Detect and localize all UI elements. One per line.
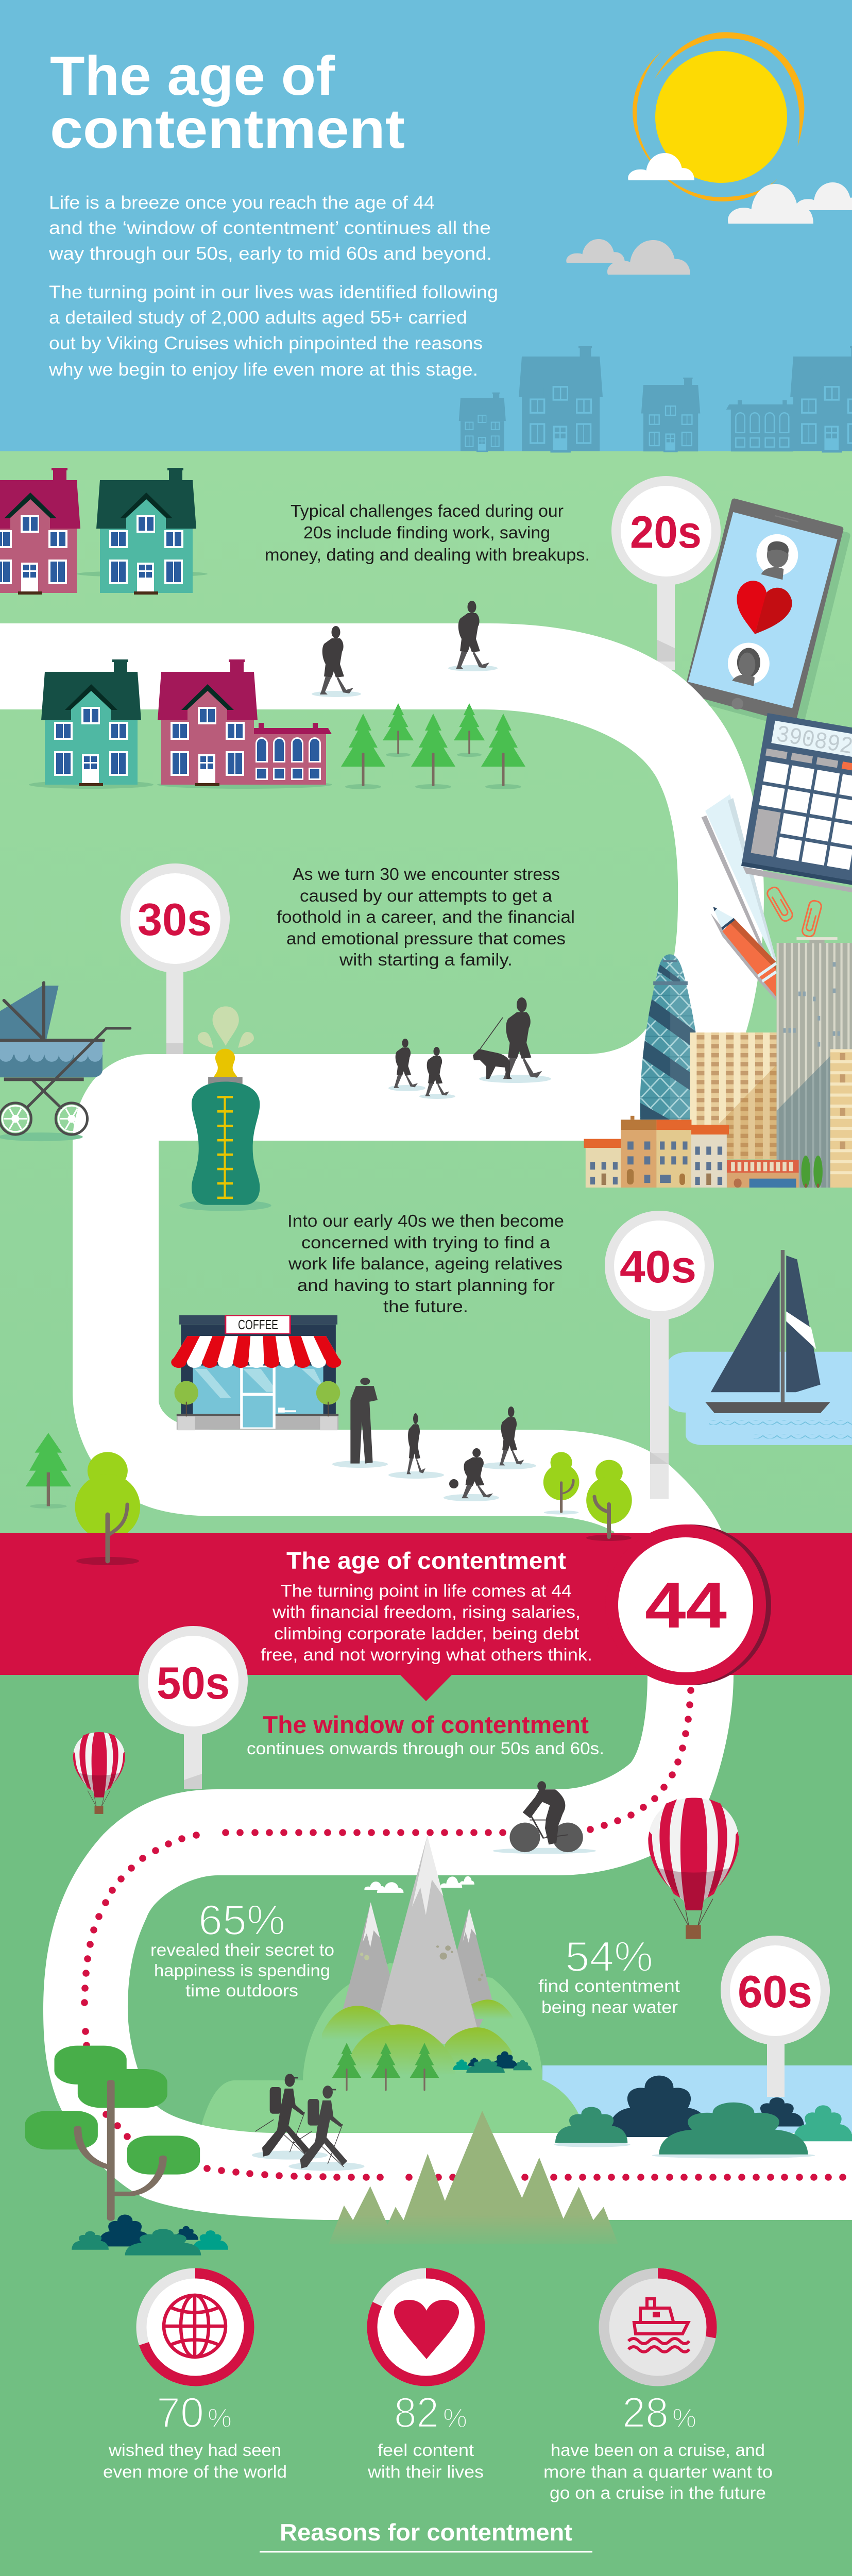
bushes by the water (554, 2076, 852, 2158)
donut: 28 percent ship (604, 2273, 712, 2381)
stat: 65 percent: time outdoors (185, 1981, 298, 2000)
stat text: 28 percent: more than a quarter want to (543, 2462, 773, 2481)
sign: 50s: 50s (157, 1657, 230, 1708)
cyclist (493, 1781, 596, 1854)
icon: ship (628, 2299, 689, 2352)
sign: 40s (605, 1211, 714, 1499)
skyline of distant houses (459, 346, 852, 452)
intro text (48, 193, 498, 380)
window of contentment heading: The window of contentment (263, 1711, 589, 1738)
sign: 20s: 20s (630, 506, 702, 557)
big tree with bushes (25, 2046, 228, 2256)
stat text: 82 percent: feel content (378, 2441, 474, 2460)
sign: 44: 44 (645, 1569, 727, 1641)
30s text block (277, 865, 575, 969)
road (0, 623, 852, 2220)
stat: 65 percent: revealed their secret to (150, 1940, 334, 1959)
stat text: 82 percent: with their lives (367, 2462, 484, 2481)
sign: 40s: 40s (620, 1241, 696, 1292)
foreground forest silhouette (329, 2111, 618, 2244)
coffee shop: COFFEE (238, 1317, 278, 1332)
title (50, 44, 405, 160)
family on the path (332, 1378, 536, 1501)
stat text: 82 percent: 82 (394, 2388, 439, 2436)
background: sky (0, 0, 852, 453)
banner: the age of contentment (0, 1533, 852, 1701)
icon: large balloon (648, 1798, 739, 1939)
intro text: why we begin to enjoy life even more at this stage. (48, 360, 478, 380)
city skyline (584, 937, 852, 1188)
sign: 60s (721, 1936, 830, 2097)
stat: 65 percent: 65% (198, 1896, 285, 1944)
20s text block: 20s include finding work, saving (303, 523, 550, 542)
woman walking dog with children (388, 997, 551, 1099)
banner: the age of contentment: The age of contentment (286, 1547, 566, 1574)
sign: 30s: 30s (138, 894, 212, 945)
stat: 54 percent (538, 1933, 680, 2016)
dotted route (81, 1687, 846, 2181)
stat text: 28 percent: % (672, 2403, 696, 2433)
sign: 44 (605, 1524, 771, 1685)
houses: top row (0, 468, 208, 595)
stat text: 28 percent (543, 2388, 773, 2502)
title: contentment (50, 97, 405, 160)
heading: reasons for contentment (260, 2519, 592, 2552)
30s text block: foothold in a career, and the financial (277, 907, 575, 926)
stat text: 28 percent: 28 (622, 2388, 669, 2436)
stat text: 70 percent: % (208, 2403, 232, 2433)
houses: second row (29, 659, 332, 789)
intro text: Life is a breeze once you reach the age of 44 (49, 193, 435, 213)
intro text: way through our 50s, early to mid 60s and beyond. (48, 244, 492, 264)
donut: 70 percent globe (141, 2273, 249, 2381)
icon: baby bottle (179, 1006, 271, 1211)
icon: small balloon (73, 1732, 125, 1814)
walkers on first stretch (312, 601, 498, 697)
40s text block: Into our early 40s we then become (287, 1211, 564, 1230)
donut: 82 percent heart (372, 2273, 480, 2381)
40s text block: concerned with trying to find a (301, 1233, 551, 1252)
icon: sun with orbit rings (633, 32, 804, 201)
tree shadows and trunks over banner (76, 1497, 632, 1565)
banner: the age of contentment: The turning point in life comes at 44 (281, 1581, 572, 1600)
window of contentment heading (247, 1711, 604, 1758)
stat text: 70 percent: 70 (157, 2388, 204, 2436)
coffee shop (171, 1315, 341, 1430)
sign: 50s (139, 1626, 248, 1789)
20s text block: money, dating and dealing with breakups. (265, 545, 590, 564)
banner: the age of contentment: with financial freedom, rising salaries, (272, 1602, 581, 1621)
sign: 60s: 60s (738, 1966, 812, 2017)
40s text block: and having to start planning for (297, 1276, 555, 1295)
20s text block (265, 501, 590, 564)
icon: globe (164, 2295, 226, 2357)
banner: the age of contentment: free, and not worrying what others think. (261, 1645, 592, 1664)
banner: the age of contentment: climbing corporate ladder, being debt (274, 1624, 579, 1643)
icon: dating app phone (687, 501, 847, 727)
stat: 65 percent (150, 1896, 334, 2000)
stat text: 70 percent: even more of the world (103, 2462, 287, 2481)
stat text: 70 percent (103, 2388, 287, 2481)
stat text: 28 percent: have been on a cruise, and (551, 2441, 765, 2460)
20s text block: Typical challenges faced during our (291, 501, 564, 520)
intro text: a detailed study of 2,000 adults aged 55+ carried (49, 308, 467, 328)
stat text: 70 percent: wished they had seen (108, 2441, 281, 2460)
stat: 54 percent: 54% (565, 1933, 653, 1980)
40s text block: the future. (383, 1297, 468, 1316)
icon: clouds in the sky (566, 153, 852, 275)
sign: 20s (611, 476, 721, 670)
title: The age of (50, 44, 335, 107)
lake with sailboat (667, 1250, 852, 1445)
30s text block: with starting a family. (339, 950, 513, 969)
icon: heart (394, 2300, 459, 2359)
30s text block: caused by our attempts to get a (300, 886, 553, 905)
window of contentment heading: continues onwards through our 50s and 60s. (247, 1739, 604, 1758)
paper, pen and paperclips (702, 794, 852, 1001)
hikers (252, 2074, 365, 2171)
background: upper meadow (0, 451, 852, 1538)
trees near the banner (26, 1433, 632, 1540)
intro text: The turning point in our lives was identified following (49, 282, 498, 302)
stat: 54 percent: being near water (541, 1997, 678, 2016)
background: lower meadow (0, 1669, 852, 2576)
stat text: 82 percent (367, 2388, 484, 2481)
stat: 65 percent: happiness is spending (154, 1961, 330, 1980)
30s text block: As we turn 30 we encounter stress (293, 865, 560, 884)
icon: pram (0, 982, 130, 1141)
sign: 30s (121, 863, 230, 1054)
intro text: and the ‘window of contentment’ continues all the (49, 218, 491, 238)
icon: calculator (741, 713, 852, 888)
40s text block: work life balance, ageing relatives (288, 1254, 563, 1273)
conifer trees row (341, 703, 525, 789)
30s text block: and emotional pressure that comes (286, 929, 566, 948)
heading: reasons for contentment: Reasons for contentment (280, 2519, 572, 2546)
lake and hills behind the road (198, 1963, 852, 2138)
intro text: out by Viking Cruises which pinpointed the reasons (49, 333, 483, 353)
trees and bushes in the valley (332, 2043, 532, 2091)
40s text block (287, 1211, 564, 1316)
stat text: 28 percent: go on a cruise in the future (550, 2483, 766, 2502)
stat text: 82 percent: % (443, 2403, 467, 2433)
mountains (322, 1836, 514, 2075)
stat: 54 percent: find contentment (538, 1976, 680, 1995)
